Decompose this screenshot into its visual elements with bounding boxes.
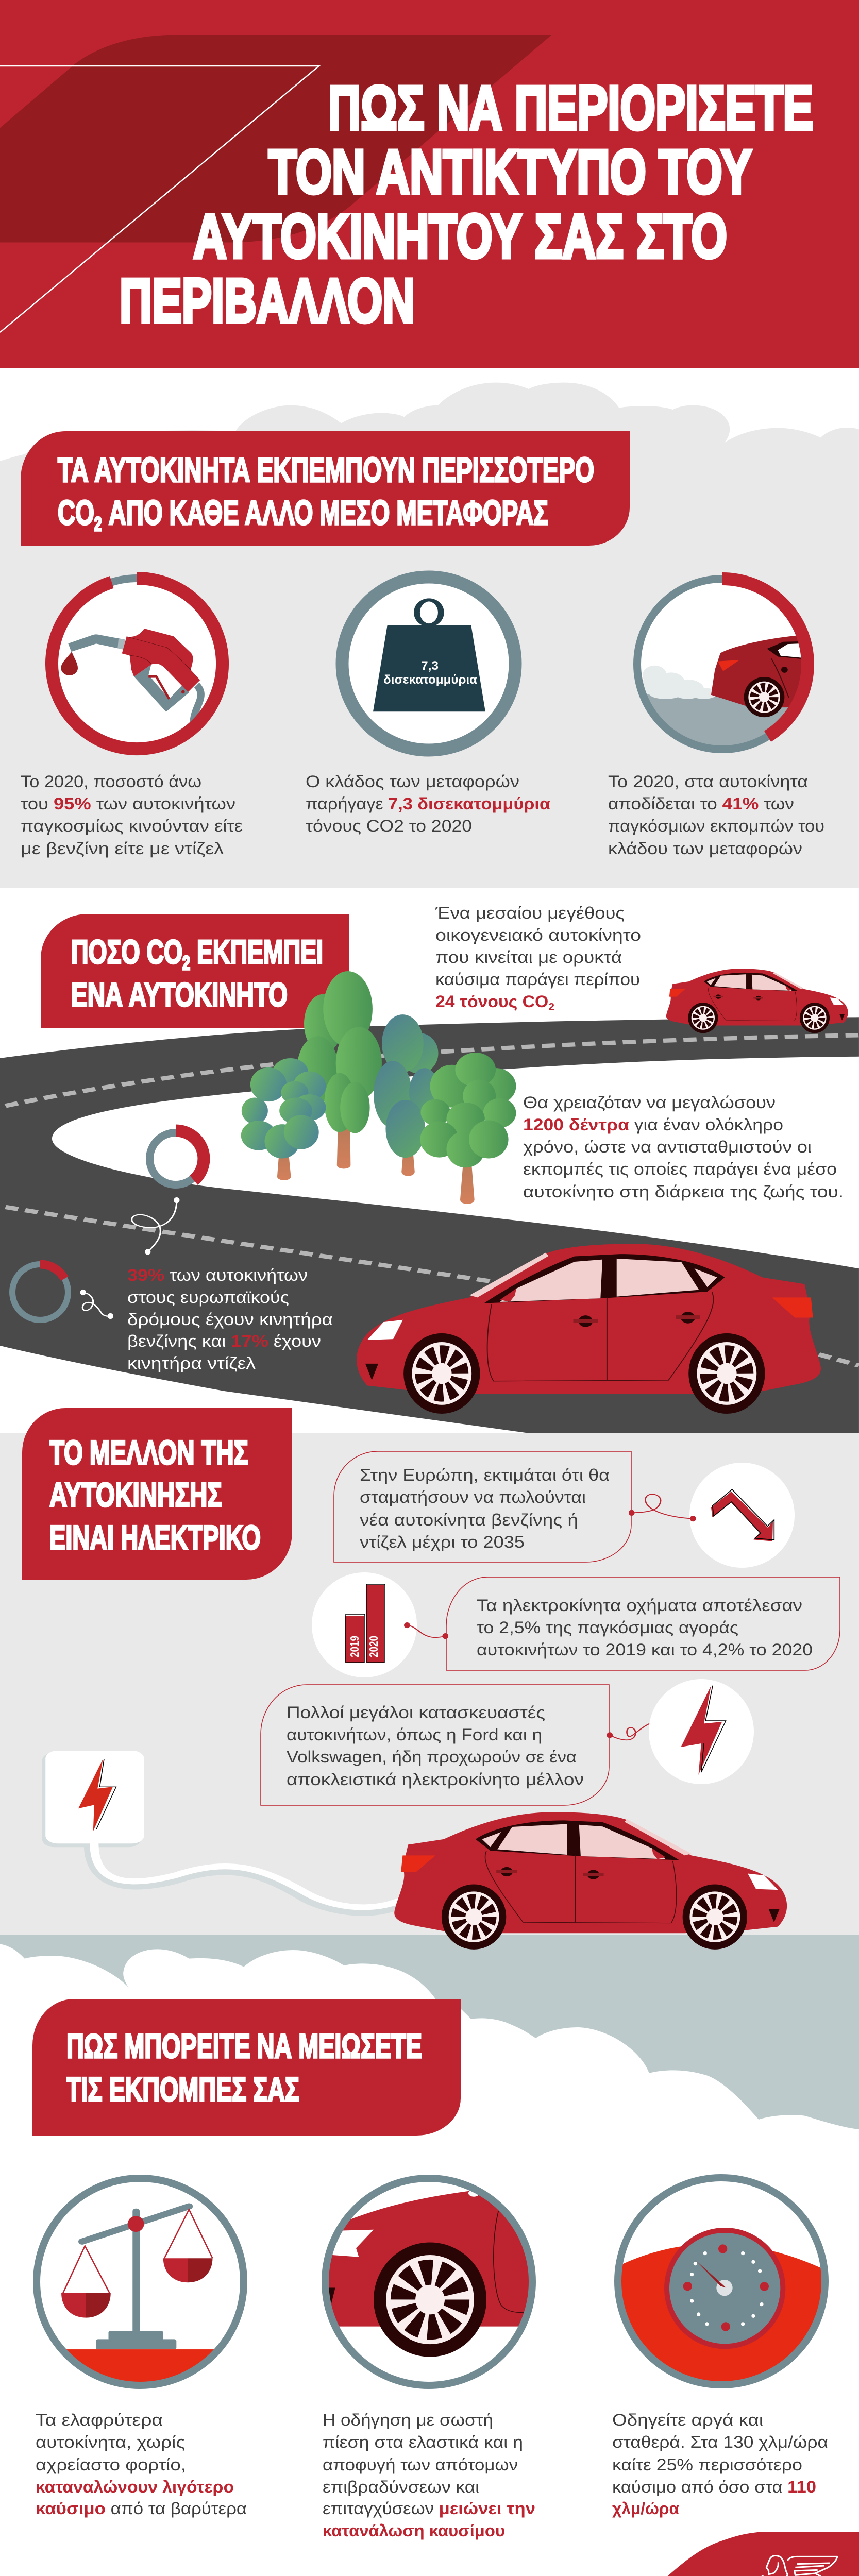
text: engine shares on road: κινητήρα ντίζελ	[127, 1354, 256, 1372]
heading banner	[21, 431, 630, 546]
connector: callout three	[607, 1717, 665, 1740]
grey background	[0, 1433, 859, 1935]
text: tyre pressure: επιταγχύσεων μειώνει την	[323, 2499, 535, 2518]
text: 7.3 billion: παρήγαγε 7,3 δισεκατομμύρια	[306, 794, 550, 813]
text: 24 tonnes: 2	[548, 1002, 554, 1013]
icon: speedometer	[618, 2178, 828, 2387]
text: engine shares on road: δρόμους έχουν κινητήρα	[127, 1310, 333, 1329]
text: lighter cars: αυτοκίνητα, χωρίς	[36, 2433, 185, 2451]
squiggle connector	[132, 1197, 179, 1255]
panel: cars emit more CO2	[0, 383, 859, 888]
heading banner	[22, 1408, 292, 1580]
text: 24 tonnes	[435, 904, 641, 1013]
text: 41 percent: παγκόσμιων εκπομπών του	[608, 817, 824, 835]
white outline stroke	[0, 66, 319, 332]
callout: manufacturers: αποκλειστικά ηλεκτροκίνητο μέλλον	[287, 1770, 584, 1789]
text: engine shares on road	[127, 1266, 333, 1372]
heading banner: ΤΟ ΜΕΛΛΟΝ ΤΗΣ	[49, 1433, 248, 1471]
title: ΠΕΡΙΒΑΛΛΟΝ	[120, 265, 415, 335]
text: tyre pressure: κατανάλωση καυσίμου	[323, 2521, 505, 2540]
logo: Generali	[751, 2556, 841, 2576]
heading banner: 2	[94, 514, 102, 535]
text: tyre pressure: πίεση στα ελαστικά και η	[323, 2433, 523, 2451]
squiggle connector	[80, 1290, 113, 1319]
text: lighter cars: αχρείαστο φορτίο,	[36, 2455, 186, 2474]
callout: market share: αυτοκινήτων το 2019 και το 4,2% το 2020	[477, 1640, 813, 1659]
text: lighter cars: καταναλώνουν λιγότερο	[36, 2478, 234, 2496]
text: 24 tonnes: που κινείται με ορυκτά	[435, 948, 622, 967]
winding road	[0, 1017, 859, 1433]
callout: market share: Τα ηλεκτροκίνητα οχήματα αποτέλεσαν	[477, 1596, 802, 1615]
heading banner: ΤΑ ΑΥΤΟΚΙΝΗΤΑ ΕΚΠΕΜΠΟΥΝ ΠΕΡΙΣΣΟΤΕΡΟ	[58, 451, 594, 489]
text: 41 percent: Το 2020, στα αυτοκίνητα	[608, 772, 808, 791]
illustration: large car	[357, 1244, 821, 1414]
text: engine shares on road: 39% των αυτοκινήτων	[127, 1266, 308, 1284]
callout: manufacturers	[261, 1685, 609, 1805]
text: 41 percent: κλάδου των μεταφορών	[608, 839, 802, 858]
text: 7.3 billion: Ο κλάδος των μεταφορών	[306, 772, 519, 791]
text: 1200 trees: 1200 δέντρα για έναν ολόκληρο	[523, 1115, 783, 1134]
illustration: trees	[241, 971, 516, 1204]
white background	[0, 888, 859, 1433]
text: lighter cars	[36, 2411, 247, 2518]
icon: fuel pump ring	[52, 578, 223, 749]
text: engine shares on road: στους ευρωπαϊκούς	[127, 1288, 289, 1307]
text: tyre pressure: Η οδήγηση με σωστή	[323, 2411, 493, 2429]
text: 7.3 billion	[306, 772, 550, 835]
dark red parallelogram	[0, 35, 552, 243]
text: drive slowly: σταθερά. Στα 130 χλμ/ώρα	[612, 2433, 828, 2451]
text: 41 percent: αποδίδεται το 41% των	[608, 794, 794, 813]
text: 95 percent: με βενζίνη είτε με ντίζελ	[21, 839, 224, 858]
text: 95 percent: παγκοσμίως κινούνταν είτε	[21, 817, 243, 835]
callout: market share: το 2,5% της παγκόσμιας αγοράς	[477, 1618, 738, 1637]
text: drive slowly: Οδηγείτε αργά και	[612, 2411, 763, 2429]
panel: how to reduce emissions	[0, 1812, 859, 2576]
icon: car exhaust ring	[630, 579, 816, 760]
text: 95 percent	[21, 772, 243, 858]
connector: callout one	[629, 1494, 696, 1521]
callout: 2035 ban: νέα αυτοκίνητα βενζίνης ή	[360, 1511, 578, 1529]
callout: 2035 ban: ντίζελ μέχρι το 2035	[360, 1533, 525, 1551]
icon: weight ring: δισεκατομμύρια	[383, 673, 477, 687]
heading banner: ΑΥΤΟΚΙΝΗΣΗΣ	[49, 1476, 222, 1514]
text: lighter cars: καύσιμο από τα βαρύτερα	[36, 2499, 247, 2518]
text: 1200 trees: χρόνο, ώστε να αντισταθμιστούν οι	[523, 1138, 812, 1156]
chart: 39 percent donut	[149, 1130, 204, 1185]
icon: weight ring	[342, 577, 515, 750]
callout: 2035 ban: σταματήσουν να πωλούνται	[360, 1488, 586, 1506]
chart: 17 percent donut	[12, 1264, 68, 1320]
callout: manufacturers: αυτοκινήτων, όπως η Ford και η	[287, 1725, 542, 1744]
text: 1200 trees: εκπομπές τις οποίες παράγει ένα μέσο	[523, 1160, 837, 1178]
text: 7.3 billion: τόνους CO2 το 2020	[306, 817, 472, 835]
text: 24 tonnes: οικογενειακό αυτοκίνητο	[435, 926, 641, 944]
illustration: electric car	[394, 1812, 787, 1950]
heading banner: ΠΟΣΟ CO	[71, 933, 227, 971]
icon: bar chart: 2020	[367, 1636, 380, 1657]
text: drive slowly: χλμ/ώρα	[612, 2499, 679, 2518]
text: 1200 trees: αυτοκίνητο στη διάρκεια της ζωής του.	[523, 1182, 844, 1201]
callout: manufacturers: Volkswagen, ήδη προχωρούν σε ένα	[287, 1748, 577, 1766]
text: lighter cars: Τα ελαφρύτερα	[36, 2411, 163, 2429]
heading banner: ΕΝΑ ΑΥΤΟΚΙΝΗΤΟ	[71, 976, 288, 1013]
icon: balance scale	[27, 2178, 258, 2398]
corner shape	[583, 2532, 859, 2576]
callout: manufacturers: Πολλοί μεγάλοι κατασκευαστές	[287, 1703, 545, 1722]
text: 24 tonnes: καύσιμα παράγει περίπου	[435, 970, 640, 989]
icon: bar chart: 2019	[348, 1636, 361, 1657]
callout: 2035 ban: Στην Ευρώπη, εκτιμάται ότι θα	[360, 1466, 610, 1484]
callout: 2035 ban	[334, 1451, 631, 1562]
text: tyre pressure	[323, 2411, 535, 2540]
blue-grey sky	[0, 1935, 859, 2141]
text: 24 tonnes: Ένα μεσαίου μεγέθους	[435, 904, 625, 922]
heading banner: ΤΙΣ ΕΚΠΟΜΠΕΣ ΣΑΣ	[66, 2070, 299, 2108]
text: 1200 trees	[523, 1093, 844, 1201]
text: 41 percent	[608, 772, 824, 858]
text: drive slowly: καίτε 25% περισσότερο	[612, 2455, 802, 2474]
icon: tyre	[323, 2178, 542, 2385]
header band	[0, 0, 859, 368]
title	[120, 73, 813, 335]
text: tyre pressure: αποφυγή των απότομων	[323, 2455, 518, 2474]
icon: lightning bolt	[649, 1679, 754, 1784]
heading banner: ΕΙΝΑΙ ΗΛΕΚΤΡΙΚΟ	[49, 1518, 261, 1556]
panel: how much CO2 a car emits	[0, 888, 859, 1433]
heading banner: 2	[182, 953, 190, 974]
icon: weight ring: 7,3	[421, 659, 439, 673]
text: 24 tonnes: 24 τόνους CO	[435, 992, 543, 1011]
text: 95 percent: του 95% των αυτοκινήτων	[21, 794, 235, 813]
heading banner: ΠΩΣ ΜΠΟΡΕΙΤΕ ΝΑ ΜΕΙΩΣΕΤΕ	[66, 2027, 422, 2065]
panel: electric future	[0, 1408, 859, 1935]
callout: market share	[446, 1577, 840, 1670]
illustration: small car	[666, 969, 848, 1033]
text: drive slowly: καύσιμο από όσο στα 110	[612, 2478, 816, 2496]
grey cloud background	[0, 383, 859, 888]
icon: down arrow	[689, 1463, 795, 1568]
connector: callout two	[404, 1622, 448, 1639]
heading banner: ΑΠΟ ΚΑΘΕ ΑΛΛΟ ΜΕΣΟ ΜΕΤΑΦΟΡΑΣ	[102, 494, 548, 532]
text: drive slowly	[612, 2411, 828, 2518]
text: 95 percent: Το 2020, ποσοστό άνω	[21, 772, 201, 791]
text: engine shares on road: βενζίνης και 17% έχουν	[127, 1332, 321, 1350]
heading banner	[41, 914, 349, 1028]
text: 1200 trees: Θα χρειαζόταν να μεγαλώσουν	[523, 1093, 776, 1112]
text: tyre pressure: επιβραδύνσεων και	[323, 2478, 479, 2496]
icon: bar chart	[312, 1572, 417, 1677]
heading banner: ΕΚΠΕΜΠΕΙ	[190, 933, 323, 971]
heading banner: CO	[58, 494, 109, 532]
white cloud	[0, 1944, 859, 2576]
icon: charger socket and cable	[42, 1751, 425, 1912]
heading banner	[32, 1999, 461, 2136]
